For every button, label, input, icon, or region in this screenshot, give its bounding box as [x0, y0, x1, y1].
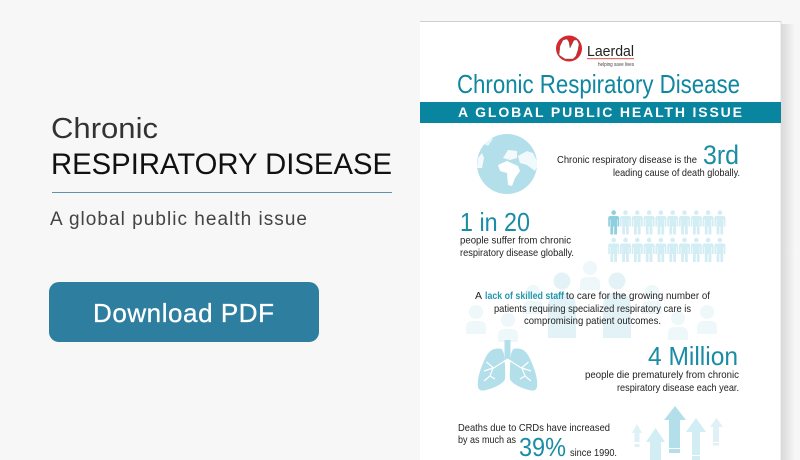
stat: 39% increase: since 1990. [570, 447, 617, 459]
banner: a global public health issue: A GLOBAL PUBLIC HEALTH ISSUE [458, 104, 742, 120]
poster title: Chronic Respiratory Disease [457, 69, 740, 99]
stat: 1 in 20: people suffer from chronic [460, 234, 571, 246]
button: Download PDF: Download PDF [93, 298, 274, 328]
stat: 1 in 20 [460, 207, 574, 259]
logo: Laerdal: Laerdal [587, 43, 634, 60]
logo: Laerdal [556, 36, 634, 68]
stat: 3rd leading cause: leading cause of death globally. [613, 167, 740, 179]
subheading: A global public health issue [50, 209, 307, 230]
icon: rising arrows [632, 406, 723, 460]
heading: Chronic Respiratory Disease: Chronic [51, 113, 158, 145]
button: Download PDF [49, 282, 319, 342]
text: lack of skilled staff: A [475, 290, 482, 302]
stat: 4 Million: 4 Million [648, 341, 738, 371]
stat: 39% increase [458, 422, 617, 460]
heading: Chronic Respiratory Disease [51, 113, 392, 181]
stat: 3rd leading cause: 3rd [703, 140, 739, 170]
stat: 4 Million [585, 341, 739, 394]
icon: globe [477, 134, 538, 194]
stat: 4 Million: respiratory disease each year. [617, 382, 739, 394]
text: lack of skilled staff: patients requiring specialized respiratory care is [494, 303, 691, 315]
logo: Laerdal: helping save lives [598, 62, 634, 68]
icon: row of people, one in twenty highlighted [608, 210, 725, 262]
stat: 39% increase: Deaths due to CRDs have increased [458, 422, 610, 434]
stat: 4 Million: people die prematurely from chronic [585, 369, 739, 381]
text: lack of skilled staff [475, 290, 710, 327]
stat: 1 in 20: 1 in 20 [460, 207, 530, 237]
heading: Chronic Respiratory Disease: RESPIRATORY DISEASE [51, 148, 392, 181]
banner: a global public health issue [420, 102, 781, 123]
text: lack of skilled staff: to care for the growing number of [566, 290, 710, 302]
stat: 1 in 20: respiratory disease globally. [460, 247, 574, 259]
text: lack of skilled staff: compromising patient outcomes. [524, 315, 661, 327]
icon: faint medical staff group [466, 261, 717, 342]
text: lack of skilled staff: lack of skilled staff [485, 290, 564, 302]
panel: infographic poster [420, 21, 795, 460]
icon: lungs [478, 340, 537, 391]
stat: 39% increase: by as much as [458, 434, 516, 446]
stat: 3rd leading cause: Chronic respiratory disease is the [557, 154, 697, 166]
stat: 3rd leading cause [557, 140, 740, 179]
